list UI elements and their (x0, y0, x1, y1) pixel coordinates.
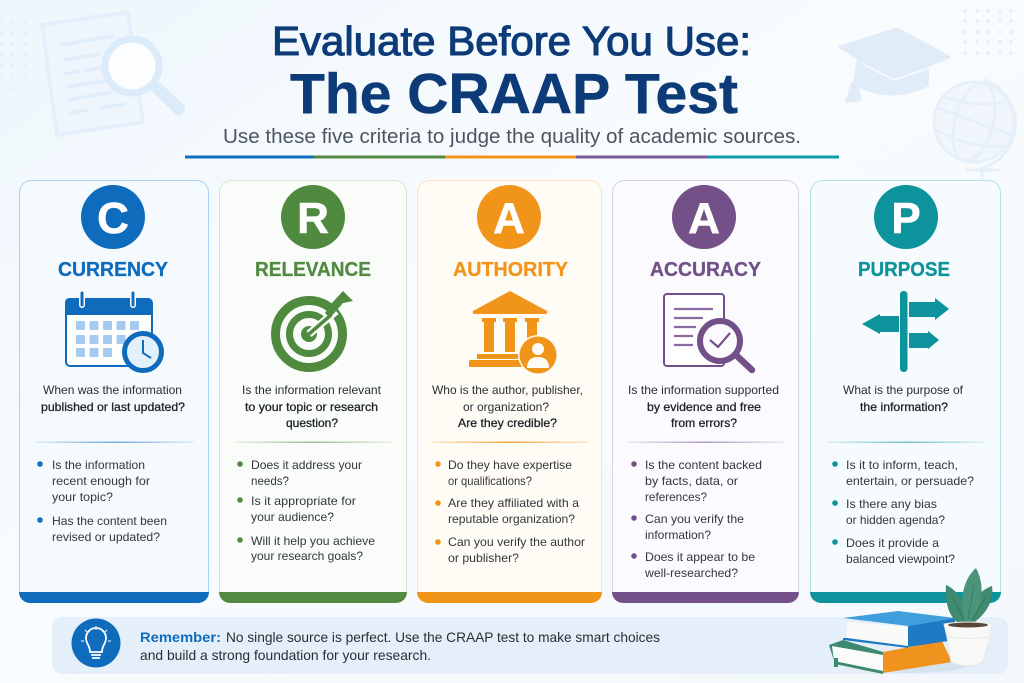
checklist (237, 458, 375, 563)
question: to your topic or research (245, 400, 378, 414)
background icon: document and magnifier (42, 12, 179, 135)
icon: calendar with clock (65, 293, 162, 370)
question (628, 383, 779, 430)
question (242, 383, 382, 430)
checklist: Is it to inform, teach, (846, 458, 958, 472)
checklist: Is the information (52, 458, 145, 472)
heading: accuracy: ACCURACY (650, 258, 761, 281)
icon: lightbulb (72, 618, 120, 668)
panel: relevance (219, 180, 407, 603)
checklist: Is it appropriate for (251, 494, 356, 508)
panel: authority (417, 180, 602, 603)
background icon: graduation cap (840, 29, 949, 103)
checklist: your audience? (251, 510, 334, 524)
panel: purpose (810, 180, 1001, 603)
callout: remember (52, 617, 1008, 674)
callout text: and build a strong foundation for your research. (140, 647, 431, 663)
checklist: your topic? (52, 490, 113, 504)
checklist: Can you verify the (645, 512, 744, 526)
question: Are they credible? (458, 416, 557, 430)
checklist: Does it appear to be (645, 550, 755, 564)
letter badge: A (477, 185, 541, 249)
heading: purpose: PURPOSE (858, 258, 950, 281)
checklist (435, 458, 585, 565)
icon: signpost (862, 291, 949, 372)
checklist (37, 458, 167, 544)
checklist: revised or updated? (52, 530, 160, 544)
panel: accuracy (612, 180, 799, 603)
letter badge: C (81, 185, 145, 249)
checklist: Does it provide a (846, 536, 939, 550)
checklist: needs? (251, 474, 289, 488)
plant leaves (946, 568, 992, 626)
subtitle: Use these five criteria to judge the quality of academic sources. (223, 126, 801, 148)
letter badge: R: R (297, 194, 329, 243)
heading: authority: AUTHORITY (453, 258, 568, 281)
checklist: or qualifications? (448, 474, 532, 488)
question: question? (286, 416, 338, 430)
question: Is the information relevant (242, 383, 382, 397)
letter badge: P (874, 185, 938, 249)
title: The CRAAP Test (290, 62, 738, 126)
checklist: balanced viewpoint? (846, 552, 955, 566)
checklist: references? (645, 490, 707, 504)
question: by evidence and free (647, 400, 761, 414)
checklist: or publisher? (448, 551, 519, 565)
question: or organization? (463, 400, 549, 414)
checklist: Has the content been (52, 514, 167, 528)
letter badge: A (672, 185, 736, 249)
letter badge: R (281, 185, 345, 249)
question: When was the information (43, 383, 182, 397)
callout text (140, 629, 660, 663)
plant pot (944, 622, 992, 666)
question (41, 383, 185, 414)
callout text: No single source is perfect. Use the CRAAP test to make smart choices (226, 629, 660, 645)
question: published or last updated? (41, 400, 185, 414)
callout text: Remember: (140, 629, 221, 645)
checklist: your research goals? (251, 549, 363, 563)
checklist: or hidden agenda? (846, 513, 945, 527)
background dots: top right (963, 9, 1013, 55)
checklist: Do they have expertise (448, 458, 572, 472)
illustration: books and plant (829, 568, 992, 674)
icon: document with magnifier check (664, 294, 752, 370)
question (432, 383, 583, 430)
question: from errors? (671, 416, 737, 430)
letter badge: P: P (891, 194, 921, 243)
checklist (631, 458, 762, 580)
checklist: Does it address your (251, 458, 362, 472)
background dots: top left (0, 20, 27, 90)
checklist: Will it help you achieve (251, 534, 375, 548)
lower book (829, 640, 952, 674)
checklist: reputable organization? (448, 512, 575, 526)
upper book (843, 611, 955, 648)
letter badge: A: A (493, 194, 525, 243)
question: the information? (860, 400, 948, 414)
icon: institution with person (469, 291, 558, 375)
checklist: information? (645, 528, 711, 542)
icon: target with arrow (276, 291, 353, 368)
background icon: globe (934, 78, 1016, 180)
checklist: by facts, data, or (645, 474, 738, 488)
checklist: Can you verify the author (448, 535, 585, 549)
title (272, 18, 751, 126)
heading: currency: CURRENCY (58, 258, 168, 281)
question: Is the information supported (628, 383, 779, 397)
checklist: Is the content backed (645, 458, 762, 472)
panel: currency (19, 180, 209, 603)
letter badge: A: A (688, 194, 720, 243)
checklist: entertain, or persuade? (846, 474, 974, 488)
question (843, 383, 964, 414)
checklist: well-researched? (644, 566, 738, 580)
question: Who is the author, publisher, (432, 383, 583, 397)
checklist: Are they affiliated with a (448, 496, 579, 510)
checklist: recent enough for (52, 474, 150, 488)
question: What is the purpose of (843, 383, 964, 397)
checklist: Is there any bias (846, 497, 937, 511)
heading: relevance: RELEVANCE (255, 258, 371, 281)
letter badge: C: C (97, 194, 129, 243)
title: Evaluate Before You Use: (272, 18, 751, 64)
checklist (832, 458, 974, 566)
multicolour title rule (185, 156, 839, 158)
